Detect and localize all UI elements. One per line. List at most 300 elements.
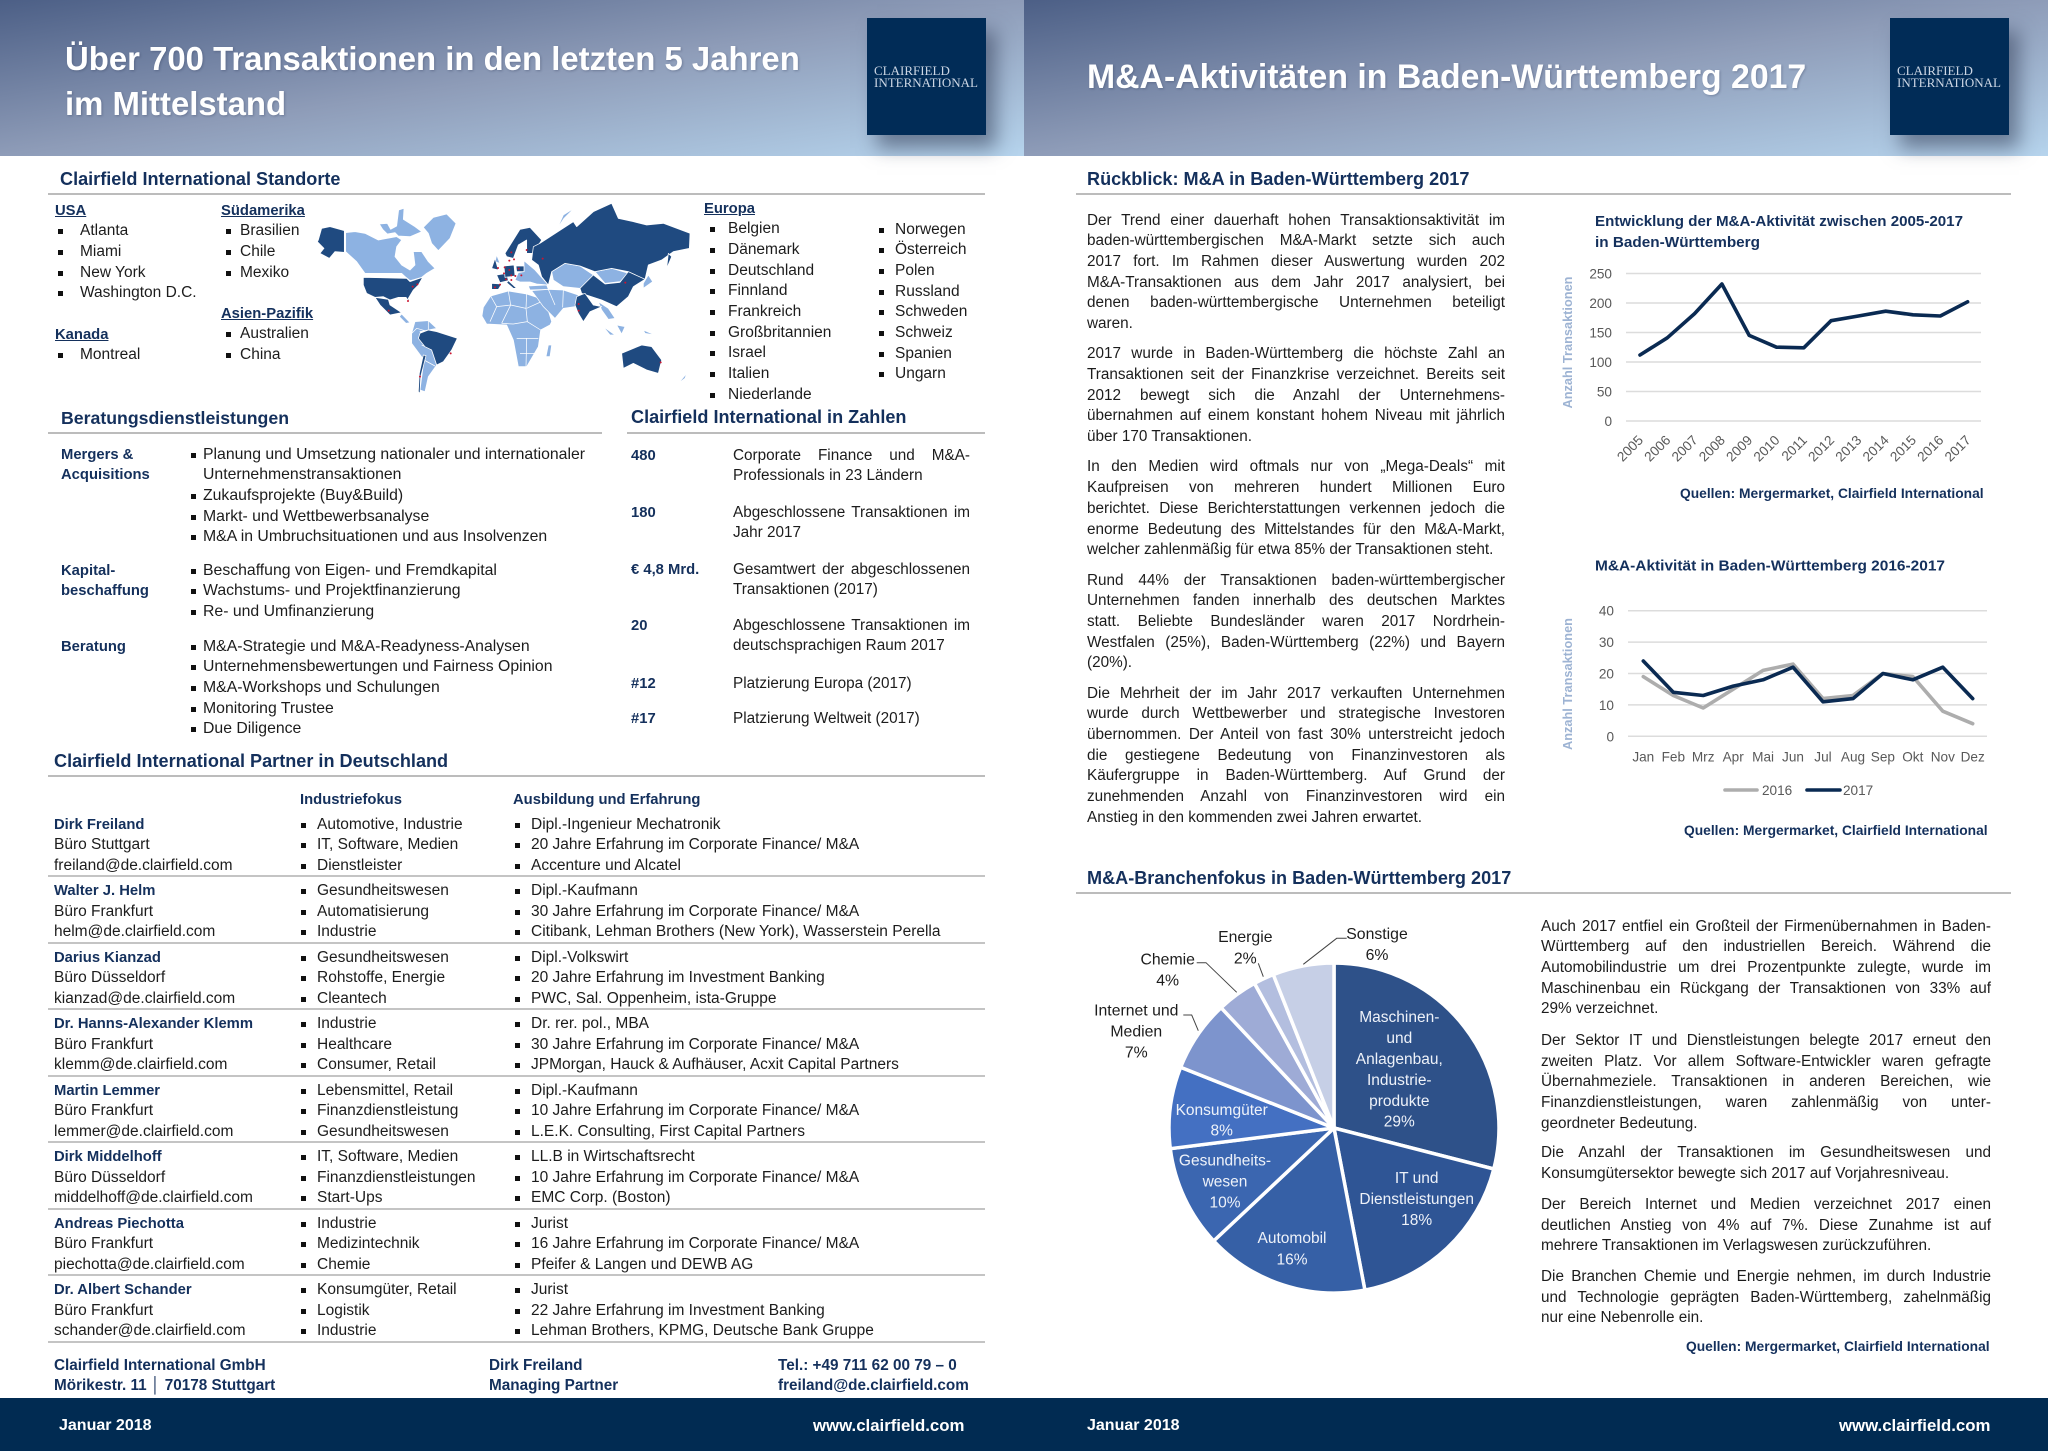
x axis labels: 2008 [1696, 433, 1728, 465]
list: Europa 2: Norwegen [895, 220, 966, 238]
partner row: Helm: Gesundheitswesen [317, 882, 449, 899]
partner row: Kianzad: kianzad@de.clairfield.com [54, 990, 235, 1007]
column head: Ausbildung: Ausbildung und Erfahrung [513, 792, 700, 808]
partner row: Piechotta: Industrie [317, 1214, 376, 1232]
pie labels white: IT und [1395, 1170, 1439, 1187]
text: 180 [733, 504, 970, 541]
heading: Partner: Clairfield International Partner in Deutschland [54, 751, 448, 771]
contact: phone and mail: Tel.: +49 711 62 00 79 – 0 [778, 1356, 957, 1374]
text: 20: deutschsprachigen Raum 2017 [733, 637, 945, 654]
list: USA: Atlanta [80, 222, 128, 239]
pie labels white: Automobil [1258, 1230, 1326, 1247]
figure: 20: 20 [631, 618, 647, 634]
logo left: CLAIRFIELD [874, 63, 950, 78]
text block: Branchen: und Technologie geprägten Baden-Württemberg, zahelnmäßig [1541, 1289, 1991, 1306]
text block: Branchen: Konsumgütersektor bewegte sich 2017 auf Vorjahresniveau. [1541, 1165, 1949, 1182]
partner row: Lemmer: 10 Jahre Erfahrung im Corporate Finance/ M&A [531, 1102, 859, 1119]
text: 4,8 Mrd: Gesamtwert der abgeschlossenen [733, 560, 970, 578]
text block: Branchen: Württemberg auf den industriellen Bereich. Während die [1541, 938, 1991, 955]
footer date left: Januar 2018 [59, 1417, 152, 1434]
contact: person [489, 1356, 618, 1394]
contact: phone and mail [778, 1356, 969, 1394]
text: #12: Platzierung Europa (2017) [733, 674, 912, 692]
title left: Über 700 Transaktionen in den letzten 5 Jahren [65, 40, 800, 77]
text block: Rückblick: welcher zahlenmäßig für etwa 85% der Transaktionen steht. [1087, 541, 1493, 558]
partner row: Schander: Logistik [317, 1302, 370, 1319]
heading: Beratung: Beratungsdienstleistungen [61, 408, 289, 428]
source: chart 2: Quellen: Mergermarket, Clairfield International [1684, 822, 1988, 838]
partner row: Lemmer: lemmer@de.clairfield.com [54, 1123, 233, 1140]
column head: Industriefokus: Industriefokus [300, 792, 402, 808]
footer url left: www.clairfield.com [813, 1416, 964, 1435]
y axis labels: 10 [1599, 698, 1614, 713]
partner row: Piechotta: piechotta@de.clairfield.com [54, 1256, 245, 1273]
partner row: Lemmer: Martin Lemmer [54, 1082, 160, 1098]
y axis labels: 30 [1599, 635, 1614, 650]
partner row: Klemm: Dr. Hanns-Alexander Klemm [54, 1016, 253, 1032]
y axis labels: 50 [1597, 384, 1612, 400]
text: 480: Corporate Finance und M&A- [733, 446, 970, 464]
partner row: Piechotta [48, 1212, 985, 1276]
partner row: Schander: Industrie [317, 1322, 376, 1339]
chart title [1595, 213, 1963, 251]
figure: 480: 480 [631, 448, 656, 464]
logo right: INTERNATIONAL [1897, 74, 2001, 90]
y axis labels: 40 [1599, 604, 1614, 619]
pie labels black: Energie [1218, 929, 1273, 946]
pie labels white: produkte [1369, 1093, 1429, 1110]
line chart: 2005-2017 [1560, 213, 1981, 465]
text block: Rückblick: baden-württembergischen M&A-Markt setzte sich auch [1087, 232, 1505, 249]
series 2017 [1643, 661, 1973, 702]
title right: M&A-Aktivitäten in Baden-Württemberg 2017 [1087, 58, 1806, 96]
text block: Rückblick: Die Mehrheit der im Jahr 2017 verkauften Unternehmen [1087, 685, 1505, 702]
pie labels white: 16% [1276, 1252, 1308, 1268]
heading: Rückblick: Rückblick: M&A in Baden-Württemberg 2017 [1087, 169, 1469, 189]
x axis labels: Sep [1871, 750, 1895, 764]
contact: company: Mörikestr. 11 │ 70178 Stuttgart [54, 1377, 275, 1394]
text: 480: Professionals in 23 Ländern [733, 467, 923, 484]
partner row: Piechotta: Andreas Piechotta [54, 1216, 184, 1232]
text block: Rückblick [1087, 212, 1505, 826]
x axis labels: Mrz [1692, 750, 1715, 764]
y axis labels: 100 [1589, 355, 1612, 370]
list: Europa 1: Israel [728, 344, 766, 361]
partner row: Schander [48, 1278, 985, 1342]
list: USA [55, 202, 197, 301]
list: Kanada: Kanada [55, 326, 108, 342]
text block: Rückblick: die gestiegene Bedeutung von Finanzinvestoren als [1087, 747, 1505, 764]
text: #17: Platzierung Weltweit (2017) [733, 710, 920, 726]
chart title: Entwicklung der M&A-Aktivität zwischen 2005-2017 [1595, 213, 1963, 230]
partner row: Helm: helm@de.clairfield.com [54, 923, 215, 940]
partner row: Klemm: Industrie [317, 1015, 376, 1032]
list: Südamerika: Brasilien [240, 222, 299, 239]
x axis labels: 2017 [1942, 433, 1974, 465]
text block: Rückblick: Unternehmen fanden innerhalb des deutschen Marktes [1087, 592, 1505, 609]
partner row: Helm: 30 Jahre Erfahrung im Corporate Finance/ M&A [531, 903, 859, 920]
partner row: Kianzad: Cleantech [317, 990, 387, 1007]
list: Europa 2: Russland [895, 283, 960, 300]
pie labels black: Chemie [1140, 952, 1195, 968]
slice: IT 18% [1334, 1128, 1494, 1290]
list: Europa 1: Niederlande [728, 386, 812, 403]
slice: Chemie 4% [1221, 983, 1334, 1128]
partner row: Piechotta: Jurist [531, 1214, 568, 1232]
list: Kapital: Re- und Umfinanzierung [203, 603, 374, 620]
y axis labels: 250 [1589, 266, 1612, 282]
y axis title: Anzahl Transaktionen [1560, 618, 1575, 750]
text: 480 [733, 446, 970, 484]
partner row: Kianzad: Dipl.-Volkswirt [531, 948, 628, 966]
partner row: Helm: Industrie [317, 923, 376, 940]
x axis labels [1614, 432, 1974, 465]
partner row: Middelhoff: middelhoff@de.clairfield.com [54, 1189, 253, 1206]
label: Mergers: Mergers & [61, 446, 133, 462]
partner row: Klemm: JPMorgan, Hauck & Aufhäuser, Acxit Capital Partners [531, 1056, 899, 1073]
partner row: Schander: Lehman Brothers, KPMG, Deutsche Bank Gruppe [531, 1322, 874, 1339]
list: USA: Miami [80, 243, 121, 260]
list: Europa 1: Italien [728, 365, 769, 382]
partner row: Middelhoff: EMC Corp. (Boston) [531, 1189, 671, 1206]
list: Europa 2: Ungarn [895, 365, 946, 382]
pie labels black: 6% [1366, 947, 1388, 964]
title left [65, 40, 800, 122]
partner row: Piechotta: Medizintechnik [317, 1235, 420, 1252]
text block: Rückblick: 2017 fort. Im Rahmen dieser Auswertung wurden 202 [1087, 253, 1505, 270]
text block: Rückblick: berichtet. Diese Berichterstattungen verkennen jedoch die [1087, 500, 1505, 517]
partner row: Klemm: Healthcare [317, 1036, 392, 1053]
list: Beratung: M&A-Workshops und Schulungen [203, 679, 440, 696]
list: Südamerika [221, 202, 305, 281]
partner row: Middelhoff: Dirk Middelhoff [54, 1149, 162, 1165]
partner row: Klemm: 30 Jahre Erfahrung im Corporate Finance/ M&A [531, 1036, 859, 1053]
panel: Beratungsdienstleistungen [48, 408, 602, 737]
list: Beratung [191, 638, 552, 737]
partner row: Schander: 22 Jahre Erfahrung im Investment Banking [531, 1302, 825, 1319]
list: USA: New York [80, 264, 145, 281]
partner row: Lemmer [48, 1079, 985, 1143]
footer url right: www.clairfield.com [1839, 1416, 1990, 1435]
partner row: Helm: Walter J. Helm [54, 883, 155, 899]
x axis labels: Dez [1961, 750, 1985, 764]
chart title: in Baden-Württemberg [1595, 234, 1760, 251]
x axis labels: 2007 [1669, 433, 1701, 465]
text block: Branchen: zweiten Platz. Vor allem Software-Entwickler waren gefragte [1541, 1053, 1991, 1070]
world map [318, 204, 690, 392]
footer date right: Januar 2018 [1087, 1417, 1180, 1434]
header band left [0, 0, 1024, 156]
pie labels black [1094, 926, 1408, 1062]
y axis labels: 20 [1599, 666, 1614, 682]
list: Asien-Pazifik: Asien-Pazifik [221, 306, 313, 322]
text block: Rückblick: 2017 wurde in Baden-Württemberg die höchste Zahl an [1087, 345, 1505, 362]
contact: phone and mail: freiland@de.clairfield.com [778, 1377, 969, 1394]
x axis labels: Mai [1752, 750, 1774, 764]
partner row: Freiland: IT, Software, Medien [317, 836, 458, 853]
text block: Rückblick: M&A-Transaktionen aus dem Jahr 2017 analysiert, bei [1087, 274, 1505, 291]
text block: Rückblick: Westfalen (25%), Baden-Württemberg (22%) und Bayern [1087, 634, 1505, 651]
text block: Rückblick: Rund 44% der Transaktionen baden-württembergischer [1087, 572, 1505, 589]
partner row: Klemm [48, 1012, 985, 1076]
partner row: Middelhoff: LL.B in Wirtschaftsrecht [531, 1148, 695, 1165]
x axis labels: 2009 [1723, 433, 1755, 465]
list: Südamerika: Südamerika [221, 202, 305, 218]
text block: Branchen: Der Bereich Internet und Medien verzeichnet 2017 einen [1541, 1196, 1991, 1213]
x axis labels: Jan [1632, 750, 1654, 764]
legend: 2016 [1762, 783, 1792, 798]
panel: Zahlen [627, 407, 985, 726]
x axis labels [1632, 750, 1985, 764]
list: Europa 1 [704, 200, 831, 403]
text: 180: Abgeschlossene Transaktionen im [733, 504, 970, 520]
partner row: Freiland: Dipl.-Ingenieur Mechatronik [531, 816, 721, 832]
list: Europa 1: Dänemark [728, 241, 800, 258]
list: Asien-Pazifik: Australien [240, 325, 309, 342]
leader lines [1183, 938, 1347, 1031]
partner row: Freiland: Automotive, Industrie [317, 816, 463, 832]
text block: Rückblick: In den Medien wird oftmals nur von „Mega-Deals“ mit [1087, 458, 1505, 475]
list: Europa 2 [879, 220, 967, 382]
partner row: Kianzad: Darius Kianzad [54, 950, 161, 966]
figure: 4,8 Mrd: € 4,8 Mrd. [631, 562, 699, 578]
x axis labels: 2012 [1805, 433, 1837, 465]
y axis labels [1599, 604, 1614, 744]
partner row: Helm: Dipl.-Kaufmann [531, 882, 638, 899]
source: pie: Quellen: Mergermarket, Clairfield International [1686, 1338, 1990, 1354]
partner row: Piechotta: Büro Frankfurt [54, 1235, 153, 1252]
x axis labels: 2006 [1641, 433, 1673, 465]
partner row: Schander: Jurist [531, 1281, 568, 1298]
partner row: Freiland: Accenture und Alcatel [531, 857, 681, 874]
text block: Rückblick: Kaufpreisen von mehreren hundert Millionen Euro [1087, 479, 1505, 496]
list: Europa 2: Österreich [895, 241, 966, 258]
list: Kapital: Beschaffung von Eigen- und Fremdkapital [203, 562, 497, 578]
text block: Branchen: Der Sektor IT und Dienstleistungen belegte 2017 erneut den [1541, 1032, 1991, 1049]
text block: Rückblick: Käufergruppe in Baden-Württemberg. Auf Grund der [1087, 767, 1505, 784]
partner row: Klemm: Dr. rer. pol., MBA [531, 1015, 649, 1032]
pie labels white: wesen [1202, 1174, 1247, 1190]
partner row: Freiland: 20 Jahre Erfahrung im Corporate Finance/ M&A [531, 836, 859, 853]
data line [1640, 284, 1968, 355]
heading: Standorte: Clairfield International Standorte [60, 169, 340, 189]
partner row: Freiland: Dirk Freiland [54, 816, 144, 832]
x axis labels: 2010 [1751, 432, 1783, 465]
list: Südamerika: Mexiko [240, 264, 289, 281]
panel: Partner [48, 751, 985, 1343]
text block: Branchen: Die Anzahl der Transaktionen im Gesundheitswesen und [1541, 1144, 1991, 1161]
list: Beratung: M&A-Strategie und M&A-Readyness-Analysen [203, 638, 530, 654]
x axis labels: Jun [1782, 750, 1804, 764]
text block: Rückblick: statt. Beliebte Bundesländer waren 2017 Nordrhein- [1087, 613, 1505, 630]
slice: Konsumgüter 8% [1169, 1067, 1334, 1149]
partner row: Lemmer: Dipl.-Kaufmann [531, 1082, 638, 1098]
label: Kapitalbeschaffung [61, 562, 149, 599]
slice: Maschinenbau 29% [1334, 963, 1499, 1169]
pie labels black: 4% [1156, 972, 1179, 990]
list: Mergers: Unternehmenstransaktionen [203, 466, 401, 483]
source: chart 1: Quellen: Mergermarket, Clairfield International [1680, 486, 1984, 500]
list: Südamerika: Chile [240, 243, 275, 260]
partner row: Kianzad: Rohstoffe, Energie [317, 969, 445, 986]
partner row: Schander: schander@de.clairfield.com [54, 1322, 246, 1339]
text block: Rückblick: Transaktionen seit der Finanzkrise verzeichnet. Bereits seit [1087, 366, 1505, 383]
logo right: CLAIRFIELD [1897, 63, 1973, 78]
slice: Energie 2% [1254, 975, 1334, 1128]
contact: company [54, 1356, 276, 1395]
list: Europa 2: Schweiz [895, 324, 953, 341]
partner row: Lemmer: L.E.K. Consulting, First Capital Partners [531, 1123, 805, 1140]
partner row: Freiland [48, 813, 985, 877]
x axis labels: Okt [1902, 750, 1924, 764]
text: 4,8 Mrd [733, 560, 970, 598]
legend [1725, 783, 1873, 798]
slice: Gesundheitswesen 10% [1170, 1128, 1334, 1241]
list: Europa 2: Schweden [895, 303, 967, 320]
x axis labels: Aug [1841, 750, 1865, 764]
list: Europa 1: Frankreich [728, 303, 801, 320]
list: Mergers: Planung und Umsetzung nationaler und internationaler [203, 446, 585, 462]
partner row: Helm: Büro Frankfurt [54, 903, 153, 920]
text block: Branchen: nur eine Nebenrolle ein. [1541, 1309, 1703, 1326]
list: Europa 1: Europa [704, 200, 755, 216]
text block: Branchen: deutlichen Anstieg von 4% auf 7%. Diese Zunahme ist auf [1541, 1217, 1991, 1234]
x axis labels: 2014 [1860, 432, 1892, 465]
label: Mergers [61, 446, 150, 483]
pie labels white: Konsumgüter [1176, 1102, 1268, 1119]
partner row: Lemmer: Gesundheitswesen [317, 1123, 449, 1140]
partner row: Middelhoff: Büro Düsseldorf [54, 1169, 165, 1186]
figure: #12: #12 [631, 676, 656, 692]
pie labels white: Maschinen- [1359, 1009, 1439, 1026]
list: Beratung: Due Diligence [203, 720, 301, 737]
pie labels white: 18% [1401, 1212, 1432, 1229]
text block: Rückblick: denen baden-württembergische Unternehmen beteiligt [1087, 294, 1505, 311]
series 2016 [1643, 664, 1973, 724]
partner row: Lemmer: Büro Frankfurt [54, 1102, 153, 1119]
text block: Branchen [1541, 918, 1992, 1326]
title left: im Mittelstand [65, 84, 286, 122]
text block: Rückblick: waren. [1087, 315, 1133, 332]
label: Mergers: Acquisitions [61, 467, 150, 483]
text block: Rückblick: zunehmenden Anzahl von Finanzinvestoren wird ein [1087, 788, 1505, 805]
partner row: Middelhoff: Start-Ups [317, 1189, 382, 1206]
pie labels white [1176, 1009, 1474, 1268]
text block: Branchen: Die Branchen Chemie und Energie nehmen, im durch Industrie [1541, 1268, 1991, 1285]
partner row: Piechotta: Chemie [317, 1256, 370, 1273]
pie labels white: 10% [1209, 1194, 1241, 1212]
list: USA: Washington D.C. [80, 284, 197, 301]
pie labels black: Sonstige [1346, 926, 1408, 943]
text block: Rückblick: Der Trend einer dauerhaft hohen Transaktionsaktivität im [1087, 212, 1505, 228]
figure: 180: 180 [631, 504, 656, 520]
x axis labels: Nov [1931, 750, 1955, 764]
pie labels white: 29% [1384, 1114, 1415, 1130]
partner row: Schander: Konsumgüter, Retail [317, 1281, 457, 1298]
text: 20 [733, 616, 970, 654]
slice: Automobil 16% [1214, 1128, 1365, 1293]
list: Mergers: M&A in Umbruchsituationen und aus Insolvenzen [203, 528, 547, 545]
list: Mergers: Markt- und Wettbewerbsanalyse [203, 508, 429, 525]
text block: Branchen: Finanzdienstleistungen, waren zahlenmäßig von unter- [1541, 1094, 1991, 1111]
list: Europa 1: Großbritannien [728, 324, 831, 341]
chart title: M&A-Aktivität in Baden-Württemberg 2016-2017 [1595, 558, 1945, 574]
list: Kapital [191, 562, 497, 620]
partner row: Middelhoff [48, 1146, 985, 1210]
label: Kapitalbeschaffung: beschaffung [61, 583, 149, 599]
list: Beratung: Unternehmensbewertungen und Fairness Opinion [203, 658, 552, 675]
text: 180: Jahr 2017 [733, 524, 801, 541]
x axis labels: 2005 [1614, 433, 1646, 465]
label: Kapitalbeschaffung: Kapital- [61, 562, 115, 578]
partner row: Freiland: Büro Stuttgart [54, 836, 150, 853]
list: Asien-Pazifik: China [240, 346, 280, 363]
partner row: Middelhoff: IT, Software, Medien [317, 1148, 458, 1165]
logo right [1890, 18, 2009, 135]
contact: person: Managing Partner [489, 1377, 618, 1394]
partner row: Kianzad: 20 Jahre Erfahrung im Investment Banking [531, 969, 825, 986]
partner row: Piechotta: Pfeifer & Langen und DEWB AG [531, 1256, 753, 1273]
partner row: Middelhoff: Finanzdienstleistungen [317, 1169, 476, 1186]
partner row: Kianzad: PWC, Sal. Oppenheim, ista-Gruppe [531, 990, 777, 1007]
x axis labels: Jul [1814, 750, 1832, 764]
partner row: Schander: Dr. Albert Schander [54, 1282, 192, 1298]
partner row: Lemmer: Lebensmittel, Retail [317, 1082, 453, 1098]
label: Beratung: Beratung [61, 638, 126, 654]
partner row: Piechotta: 16 Jahre Erfahrung im Corporate Finance/ M&A [531, 1235, 859, 1252]
list: Europa 1: Deutschland [728, 262, 814, 279]
pie chart [1094, 926, 1498, 1292]
line chart: 2016-2017 [1560, 558, 1987, 798]
partner row: Kianzad: Gesundheitswesen [317, 948, 449, 966]
heading: Zahlen: Clairfield International in Zahlen [631, 407, 906, 427]
text block: Rückblick: übernommen. Der Anteil von fast 30% unterstreicht jedoch [1087, 726, 1505, 743]
text block: Branchen: Maschinenbau ein Rückgang der Transaktionen von 33% auf [1541, 980, 1991, 997]
x axis labels: Apr [1723, 750, 1744, 764]
pie labels black: 2% [1234, 950, 1257, 968]
text block: Branchen: mehrere Transaktionen im Verlagswesen zurückzuführen. [1541, 1237, 1931, 1254]
list: Mergers: Zukaufsprojekte (Buy&Build) [203, 487, 403, 504]
partner row: Lemmer: Finanzdienstleistung [317, 1102, 458, 1119]
text: 4,8 Mrd: Transaktionen (2017) [733, 581, 878, 598]
pie labels black: Internet und [1094, 1002, 1178, 1020]
x axis labels: 2013 [1833, 433, 1865, 465]
pie labels white: Anlagenbau, [1356, 1051, 1443, 1068]
partner row: Kianzad: Büro Düsseldorf [54, 969, 165, 986]
partner row: Klemm: Büro Frankfurt [54, 1036, 153, 1053]
pie labels white: 8% [1210, 1122, 1233, 1140]
pie labels white: Industrie- [1367, 1072, 1432, 1089]
text block: Branchen: geordneter Bedeutung. [1541, 1115, 1698, 1132]
pie labels white: Gesundheits- [1179, 1152, 1271, 1170]
partner row: Klemm: Consumer, Retail [317, 1056, 436, 1073]
x axis labels: Feb [1662, 750, 1685, 764]
y axis labels [1589, 266, 1612, 429]
text block: Branchen: Automobilindustrie um drei Prozentpunkte zulegte, wurde im [1541, 959, 1991, 976]
partner row: Kianzad [48, 946, 985, 1010]
footer bar [0, 1398, 2048, 1451]
slice: Internet 7% [1181, 1008, 1334, 1128]
logo left [867, 18, 986, 135]
figure: #17: #17 [631, 710, 656, 726]
header band right [1024, 0, 2048, 156]
logo left: INTERNATIONAL [874, 74, 978, 90]
list: Europa 1: Finnland [728, 282, 787, 299]
slice: Sonstige 6% [1273, 963, 1334, 1128]
list: USA: USA [55, 202, 86, 218]
contact: company: Clairfield International GmbH [54, 1356, 266, 1374]
panel: Standorte [48, 169, 985, 403]
